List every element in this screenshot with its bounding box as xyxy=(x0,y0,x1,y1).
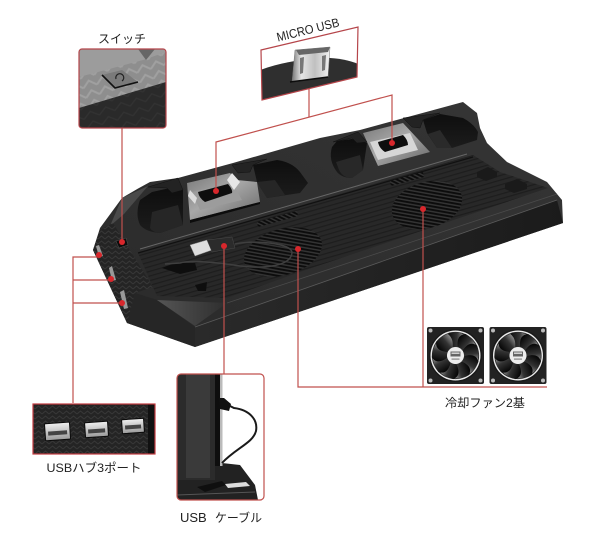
fan vent right xyxy=(386,173,468,237)
cradle tabs xyxy=(148,178,183,193)
port 3 xyxy=(122,418,144,434)
charging plate 2 xyxy=(363,123,430,166)
icon: cooling fan 1 xyxy=(427,327,484,384)
charging plate 1 xyxy=(187,173,260,220)
panel: usb cable detail xyxy=(172,374,264,500)
label: cooling fans: 冷却ファン2基 xyxy=(445,396,525,410)
tray pegs xyxy=(477,167,497,181)
chamfer highlight xyxy=(157,300,227,326)
rear vent slit right xyxy=(390,172,424,186)
label: switch: スイッチ xyxy=(98,32,146,46)
panel: micro usb detail xyxy=(260,26,359,101)
product: cooling stand xyxy=(93,102,563,347)
panel: usb hub detail xyxy=(33,404,155,454)
fan vent left xyxy=(238,219,328,285)
controller well 2 xyxy=(253,160,308,198)
port 1 xyxy=(44,422,71,441)
rear vent slit left xyxy=(257,211,298,227)
panel: switch detail xyxy=(79,49,166,128)
usb cable on stand xyxy=(165,237,292,267)
usb ports on stand xyxy=(96,245,103,257)
icon: cooling fan 2 xyxy=(490,327,546,384)
carbon hub face xyxy=(93,223,153,323)
stand body outline xyxy=(93,102,563,347)
controller well 4 xyxy=(423,114,478,148)
label: usb cable: USB xyxy=(180,510,207,525)
corner highlight xyxy=(110,186,148,226)
power button xyxy=(116,238,128,248)
label: micro usb: MICRO USB xyxy=(275,15,341,45)
red marker dots xyxy=(96,140,426,306)
label: usb hub: USBハブ3ポート xyxy=(46,460,142,475)
callout lines xyxy=(73,88,547,403)
controller well 3 xyxy=(331,139,367,178)
label: cable: ケーブル xyxy=(215,510,262,525)
stand front face xyxy=(195,200,563,347)
console tray with ribs xyxy=(138,155,548,298)
port 2 xyxy=(85,421,109,438)
controller well 1 xyxy=(138,188,183,233)
